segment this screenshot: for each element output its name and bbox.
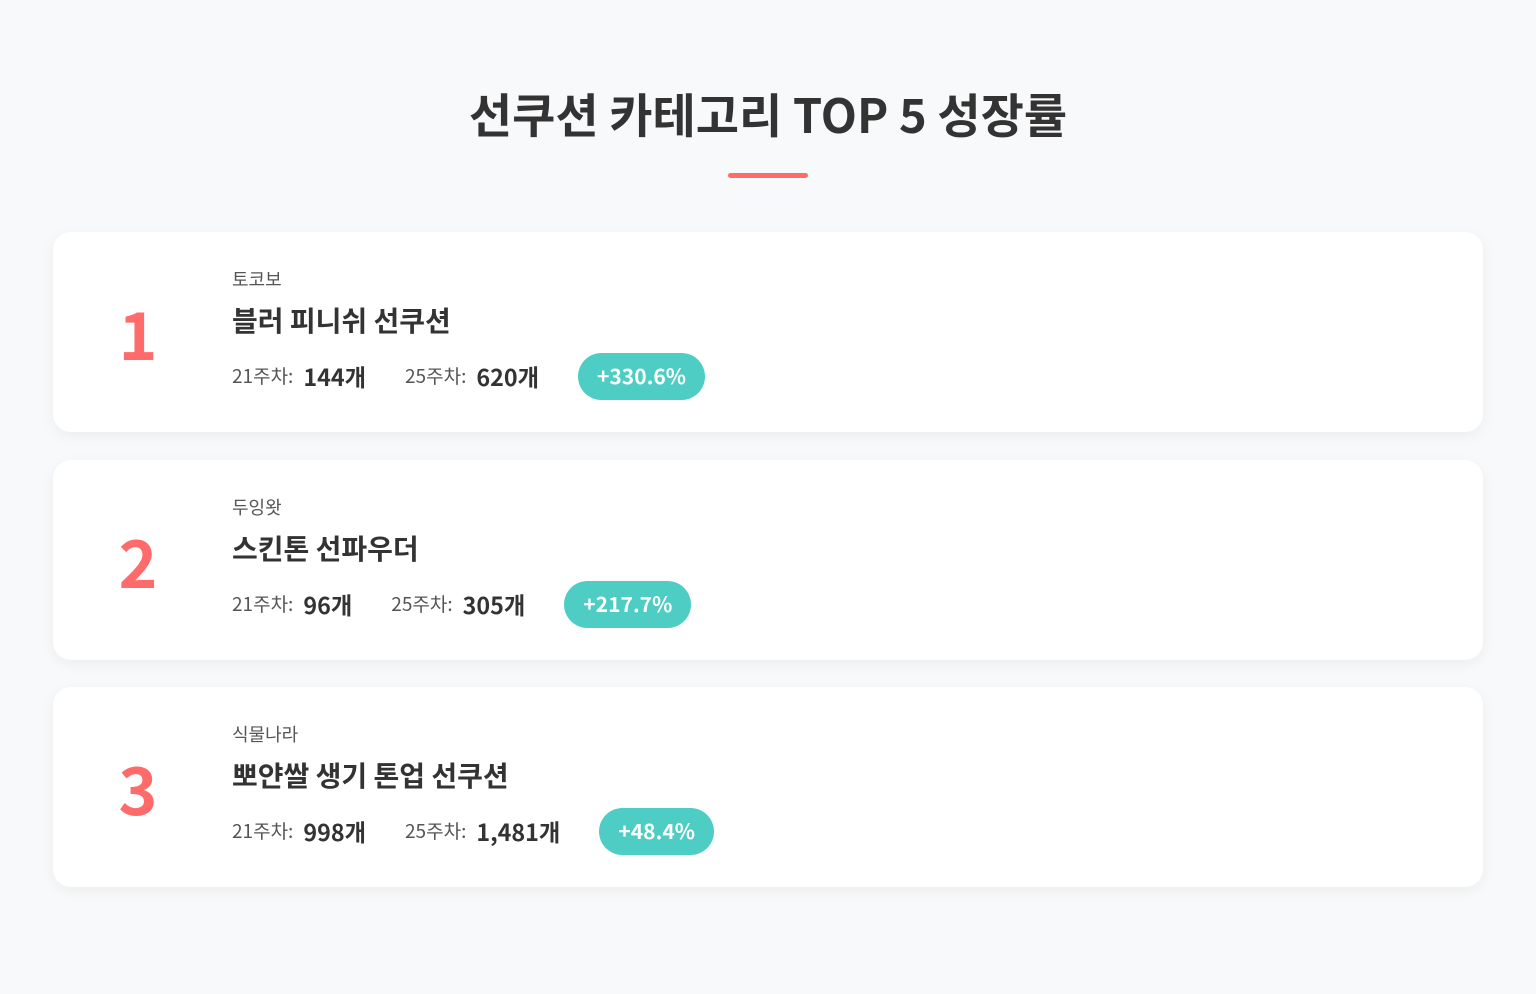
product name: 스킨톤 선파우더	[232, 528, 419, 568]
stats row: 25주차:	[405, 362, 466, 389]
brand: 두잉왓	[232, 494, 282, 520]
stats row	[232, 808, 714, 855]
card: rank 3	[53, 687, 1483, 887]
stats row: +330.6%	[597, 361, 686, 391]
stats row: 21주차:	[232, 817, 293, 844]
stats row	[232, 581, 691, 628]
brand: 토코보	[232, 266, 282, 292]
stats row: 96개	[303, 587, 352, 621]
stats row: 144개	[303, 359, 366, 393]
title: 선쿠션 카테고리 TOP 5 성장률	[469, 78, 1067, 147]
card: rank 1	[53, 232, 1483, 432]
brand: 식물나라	[232, 721, 298, 747]
stats row	[232, 353, 705, 400]
stats row: 620개	[476, 359, 539, 393]
stats row: +217.7%	[583, 589, 672, 619]
rank number: 1	[119, 284, 157, 380]
stats row: 1,481개	[476, 814, 560, 848]
stats row: 998개	[303, 814, 366, 848]
stats row: 25주차:	[405, 817, 466, 844]
rank number: 2	[119, 512, 157, 608]
stats row: 25주차:	[391, 590, 453, 617]
product name: 뽀얀쌀 생기 톤업 선쿠션	[232, 755, 509, 795]
card: rank 2	[53, 460, 1483, 660]
product name: 블러 피니쉬 선쿠션	[232, 300, 451, 340]
rank number: 3	[119, 739, 157, 835]
title underline	[728, 173, 808, 178]
stats row: +48.4%	[618, 816, 695, 846]
stats row: 21주차:	[232, 590, 293, 617]
stats row: 305개	[463, 587, 525, 621]
stats row: 21주차:	[232, 362, 293, 389]
